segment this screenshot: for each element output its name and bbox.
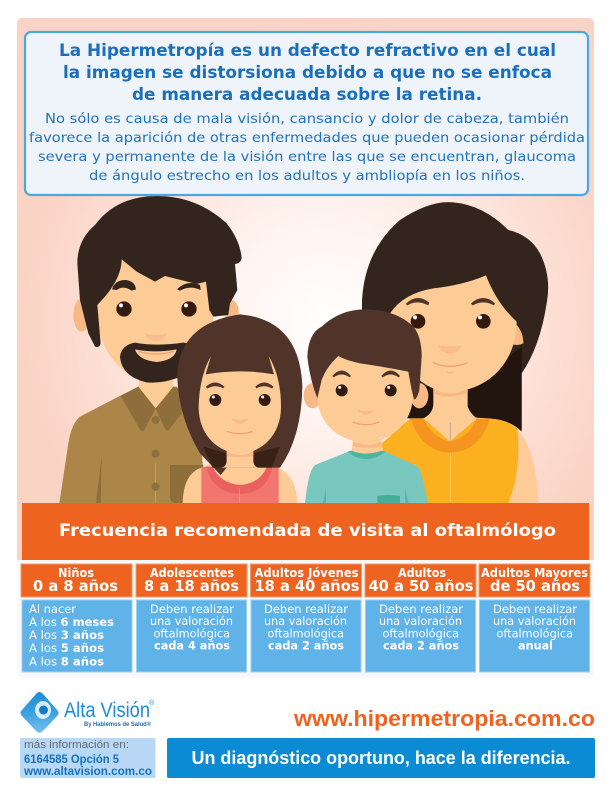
table column: adultos: Adultos <box>398 566 446 580</box>
figure: father <box>59 196 242 503</box>
text block: explanation: severa y permanente de la visión entre las que se encuentran, glaucoma <box>38 149 576 165</box>
table column: niños <box>21 564 132 672</box>
figure: daughter <box>177 314 302 503</box>
table column: adolescentes: una valoración <box>150 614 233 628</box>
table column: niños: A los 5 años <box>29 641 104 655</box>
text block: explanation <box>29 111 585 184</box>
contact box: 6164585 Opción 5 <box>24 752 119 766</box>
panel: frequency table background <box>17 560 594 678</box>
table column: adultos: Deben realizar <box>379 602 463 616</box>
table column: adultos jóvenes: 18 a 40 años <box>254 577 360 595</box>
logo: Alta Visión <box>20 692 155 733</box>
table column: adolescentes <box>136 564 247 672</box>
illustration: family <box>59 196 548 503</box>
table column: adolescentes: cada 4 años <box>154 638 230 652</box>
table column: adultos jóvenes <box>250 564 362 672</box>
table column: adolescentes: Deben realizar <box>150 602 234 616</box>
table column: adultos mayores: oftalmológica <box>496 626 573 640</box>
heading: definition: de manera adecuada sobre la retina. <box>132 85 482 104</box>
table column: adultos <box>365 564 476 672</box>
panel: intro text box <box>25 32 588 195</box>
table column: niños: Niños <box>58 566 94 580</box>
table column: adultos jóvenes: Deben realizar <box>264 602 348 616</box>
table column: adultos jóvenes: Adultos Jóvenes <box>254 566 358 580</box>
banner: table title: Frecuencia recomendada de visita al oftalmólogo <box>59 521 556 541</box>
figure: son <box>304 309 428 503</box>
text block: explanation: de ángulo estrecho en los adultos y ambliopía en los niños. <box>89 168 525 184</box>
panel: illustration background <box>17 18 594 563</box>
contact box: más información en: <box>24 739 129 751</box>
slogan banner: Un diagnóstico oportuno, hace la diferencia. <box>192 748 570 768</box>
table column: adultos mayores <box>479 564 590 672</box>
table column: adultos jóvenes: una valoración <box>264 614 347 628</box>
table column: adultos mayores: de 50 años <box>490 577 580 595</box>
table column: adultos mayores: Deben realizar <box>493 602 577 616</box>
logo: Alta Visión: Alta Visión <box>64 699 150 722</box>
logo: Alta Visión: ® <box>149 699 155 707</box>
table column: adultos: una valoración <box>379 614 462 628</box>
heading: definition: La Hipermetropía es un defecto refractivo en el cual <box>59 41 556 60</box>
heading: definition: la imagen se distorsiona debido a que no se enfoca <box>63 63 552 82</box>
table column: adultos mayores: una valoración <box>493 614 576 628</box>
slogan banner <box>167 738 595 778</box>
table column: niños: 0 a 8 años <box>33 577 118 595</box>
text block: explanation: favorece la aparición de otras enfermedades que pueden ocasionar pérdida <box>29 130 585 146</box>
text block: explanation: No sólo es causa de mala visión, cansancio y dolor de cabeza, también <box>45 111 569 127</box>
table column: adultos jóvenes: oftalmológica <box>268 626 344 640</box>
contact box <box>20 738 156 778</box>
table column: niños: Al nacer <box>29 602 76 616</box>
table column: adolescentes: oftalmológica <box>154 626 230 640</box>
table column: adultos mayores: anual <box>518 638 553 652</box>
table column: adultos mayores: Adultos Mayores <box>481 566 588 580</box>
table column: adolescentes: 8 a 18 años <box>144 577 239 595</box>
logo: Alta Visión: By Hablemos de Salud® <box>84 721 152 728</box>
table column: niños: A los 6 meses <box>29 615 114 629</box>
table column: adultos: cada 2 años <box>383 638 459 652</box>
table column: niños: A los 3 años <box>29 628 104 642</box>
heading: definition <box>59 41 556 104</box>
contact box: www.altavision.com.co <box>23 764 152 778</box>
banner: table title <box>22 503 589 560</box>
table column: niños: A los 8 años <box>29 654 104 668</box>
table column: adolescentes: Adolescentes <box>150 566 234 580</box>
icon: eye diamond <box>20 692 58 733</box>
table column: adultos: 40 a 50 años <box>368 577 474 595</box>
table column: adultos: oftalmológica <box>382 626 459 640</box>
table column: adultos jóvenes: cada 2 años <box>268 638 344 652</box>
figure: mother <box>362 202 548 503</box>
website url: www.hipermetropia.com.co <box>293 706 595 731</box>
